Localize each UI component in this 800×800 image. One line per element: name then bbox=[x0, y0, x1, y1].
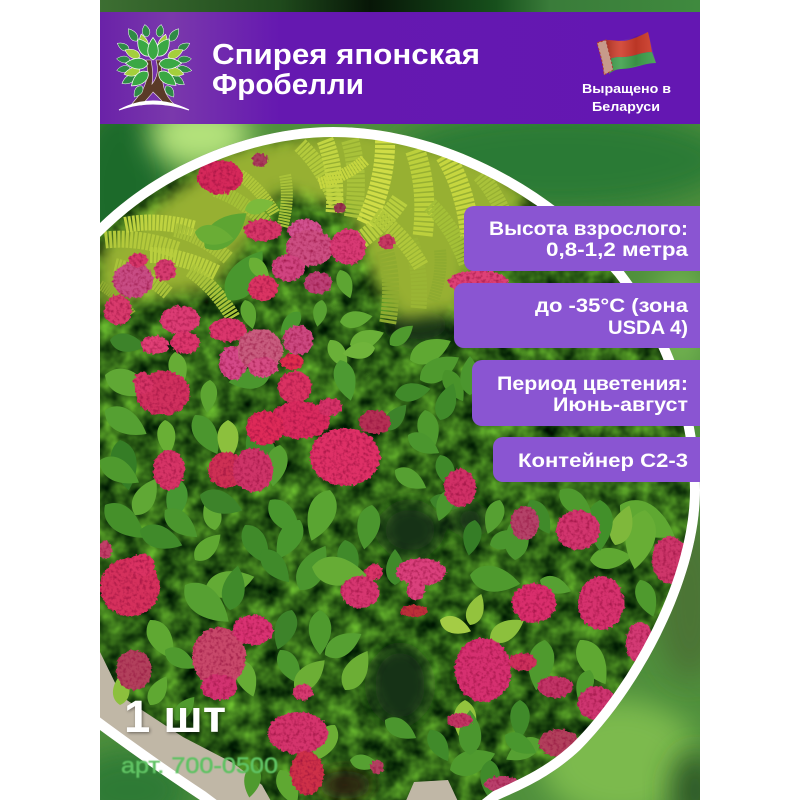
circular plant photo bbox=[60, 120, 700, 800]
pill: frost hardiness: USDA 4) bbox=[608, 317, 688, 339]
logo trunk bbox=[131, 60, 175, 105]
foliage base bbox=[60, 120, 700, 800]
pill: adult height bbox=[464, 206, 700, 271]
header banner bbox=[100, 12, 700, 124]
green leaves bbox=[94, 195, 682, 800]
pill: adult height: 0,8-1,2 метра bbox=[546, 239, 688, 261]
flower clusters bbox=[98, 153, 688, 795]
pill: flowering period: Июнь-август bbox=[553, 394, 688, 416]
infographic canvas bbox=[100, 0, 700, 800]
pill: container bbox=[493, 437, 700, 482]
pill: adult height: Высота взрослого: bbox=[489, 218, 688, 240]
logo leaves bbox=[116, 24, 192, 99]
pill: frost hardiness: до -35°C (зона bbox=[535, 295, 688, 317]
caption: grown in Belarus bbox=[582, 82, 671, 114]
title: Спирея японская bbox=[212, 39, 480, 71]
soil and shadows bbox=[319, 305, 486, 799]
logo: tree bbox=[116, 24, 192, 110]
pill: container: Контейнер С2-3 bbox=[518, 450, 688, 472]
quantity label: 1 шт bbox=[124, 691, 226, 742]
caption: grown in Belarus: Беларуси bbox=[592, 100, 660, 114]
title: Фробелли bbox=[212, 69, 364, 101]
white photo ring bbox=[60, 127, 700, 800]
logo ground arc bbox=[119, 101, 189, 110]
pill: frost hardiness bbox=[454, 283, 700, 348]
title bbox=[212, 39, 480, 101]
caption: grown in Belarus: Выращено в bbox=[582, 82, 671, 96]
icon: Belarus flag bbox=[597, 32, 656, 75]
article number: арт. 700-0500 bbox=[121, 753, 278, 778]
fern fronds bbox=[94, 140, 529, 324]
pill: flowering period: Период цветения: bbox=[497, 373, 688, 395]
concrete path bbox=[90, 650, 462, 800]
fern zone tint bbox=[100, 125, 530, 320]
pill: flowering period bbox=[472, 360, 700, 426]
